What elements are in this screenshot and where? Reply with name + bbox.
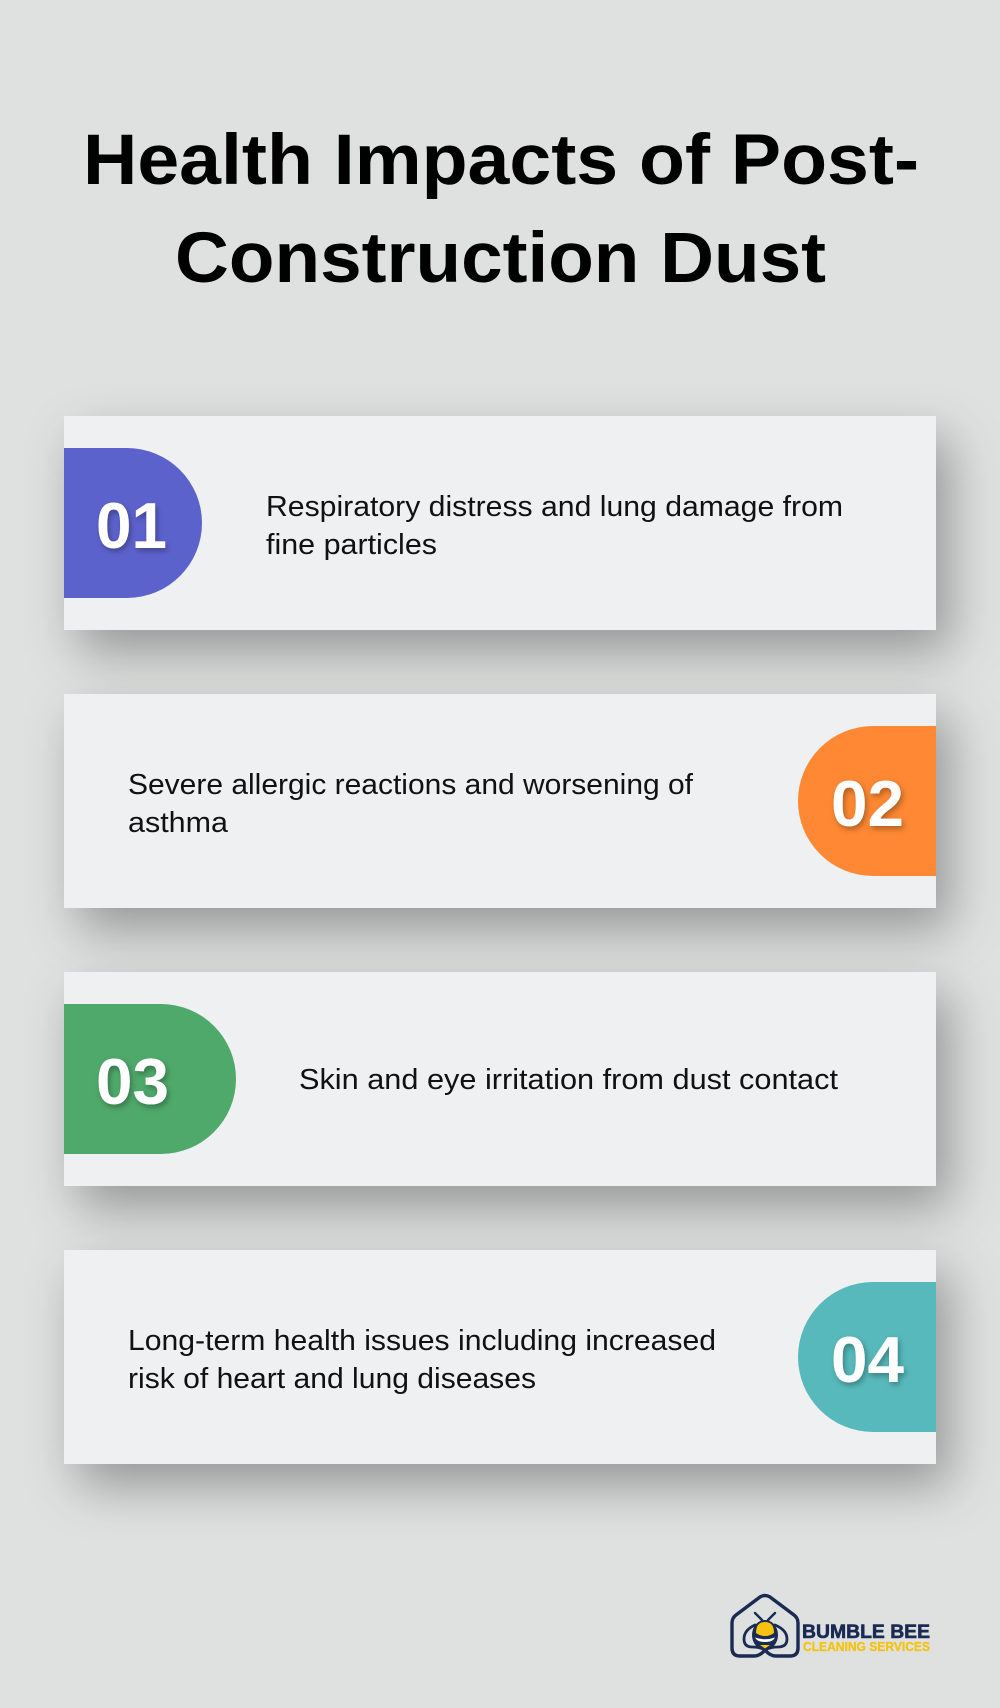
text: item 02 <box>128 769 693 839</box>
text: item 04: risk of heart and lung diseases <box>128 1363 536 1395</box>
logo: Bumble Bee Cleaning Services <box>732 1596 930 1656</box>
badge: 04 <box>798 1282 936 1432</box>
badge: 03 <box>64 1004 236 1154</box>
panel: item 01 <box>64 416 950 652</box>
icon: bee in house <box>732 1596 798 1656</box>
text: item 01 <box>266 491 843 561</box>
badge: 02 <box>798 726 936 876</box>
wordmark <box>802 1621 930 1654</box>
badge: 01 <box>64 448 202 598</box>
badge: 04: 04 <box>831 1323 904 1396</box>
text: item 04 <box>128 1325 716 1395</box>
panel: item 03 <box>64 972 950 1208</box>
badge: 02: 02 <box>831 767 904 840</box>
text: item 01: Respiratory distress and lung damage from <box>266 491 843 523</box>
badge: 03: 03 <box>96 1045 169 1118</box>
badge: 01: 01 <box>96 489 167 562</box>
text: item 03: Skin and eye irritation from dust contact <box>299 1064 838 1096</box>
text: item 04: Long-term health issues including increased <box>128 1325 716 1357</box>
title <box>83 121 919 298</box>
panel: item 02 <box>64 694 950 930</box>
wordmark: BUMBLE BEE <box>802 1621 930 1643</box>
panel: item 04 <box>64 1250 950 1486</box>
text: item 02: asthma <box>128 807 228 839</box>
wordmark: CLEANING SERVICES <box>803 1640 930 1654</box>
text: item 02: Severe allergic reactions and worsening of <box>128 769 693 801</box>
title: Health Impacts of Post- <box>83 121 919 200</box>
title: Construction Dust <box>175 219 826 298</box>
text: item 01: fine particles <box>266 529 437 561</box>
